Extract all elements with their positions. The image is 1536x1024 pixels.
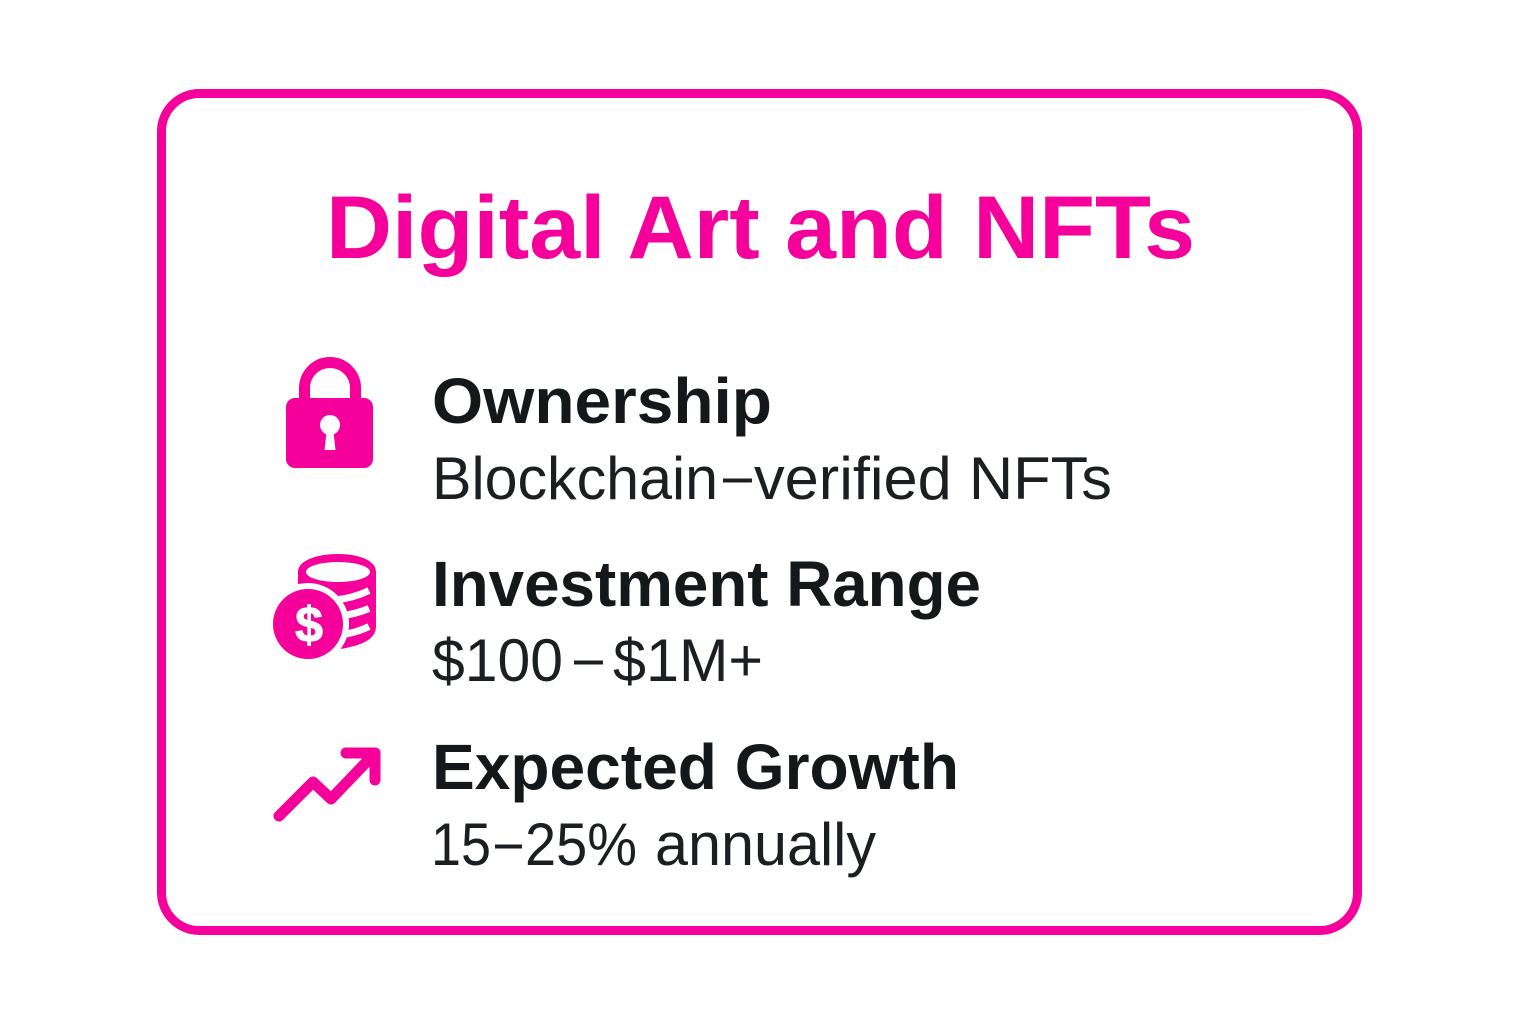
row: ownership: [286, 362, 1112, 512]
text: expected growth detail: 25%: [525, 811, 637, 878]
title: Digital Art and NFTs: [326, 177, 1195, 277]
text: expected growth detail: [431, 808, 876, 878]
panel: card frame: [162, 94, 1358, 930]
text: ownership detail: [432, 442, 1112, 512]
text: expected growth detail: annually: [655, 811, 876, 878]
heading: expected growth: Expected Growth: [432, 731, 959, 803]
text: investment range detail: [432, 624, 763, 694]
heading: ownership: Ownership: [432, 365, 772, 437]
text: ownership detail: Blockchain: [432, 445, 718, 512]
row: expected growth: [279, 731, 959, 878]
text: expected growth detail: 15: [431, 811, 491, 878]
text: expected growth detail: –: [495, 808, 523, 875]
text: ownership detail: –: [723, 442, 753, 509]
text: ownership detail: verified NFTs: [754, 445, 1112, 512]
icon: coin stack with dollar coin: [267, 554, 376, 665]
text: investment range detail: $1M+: [613, 627, 763, 694]
icon: coin stack with dollar coin: $: [295, 597, 323, 653]
row: investment range: [267, 548, 981, 694]
icon: padlock: [286, 362, 373, 468]
heading: investment range: Investment Range: [432, 548, 981, 620]
icon: trend arrow: [279, 753, 375, 816]
text: investment range detail: –: [574, 624, 604, 691]
text: investment range detail: $100: [432, 627, 563, 694]
